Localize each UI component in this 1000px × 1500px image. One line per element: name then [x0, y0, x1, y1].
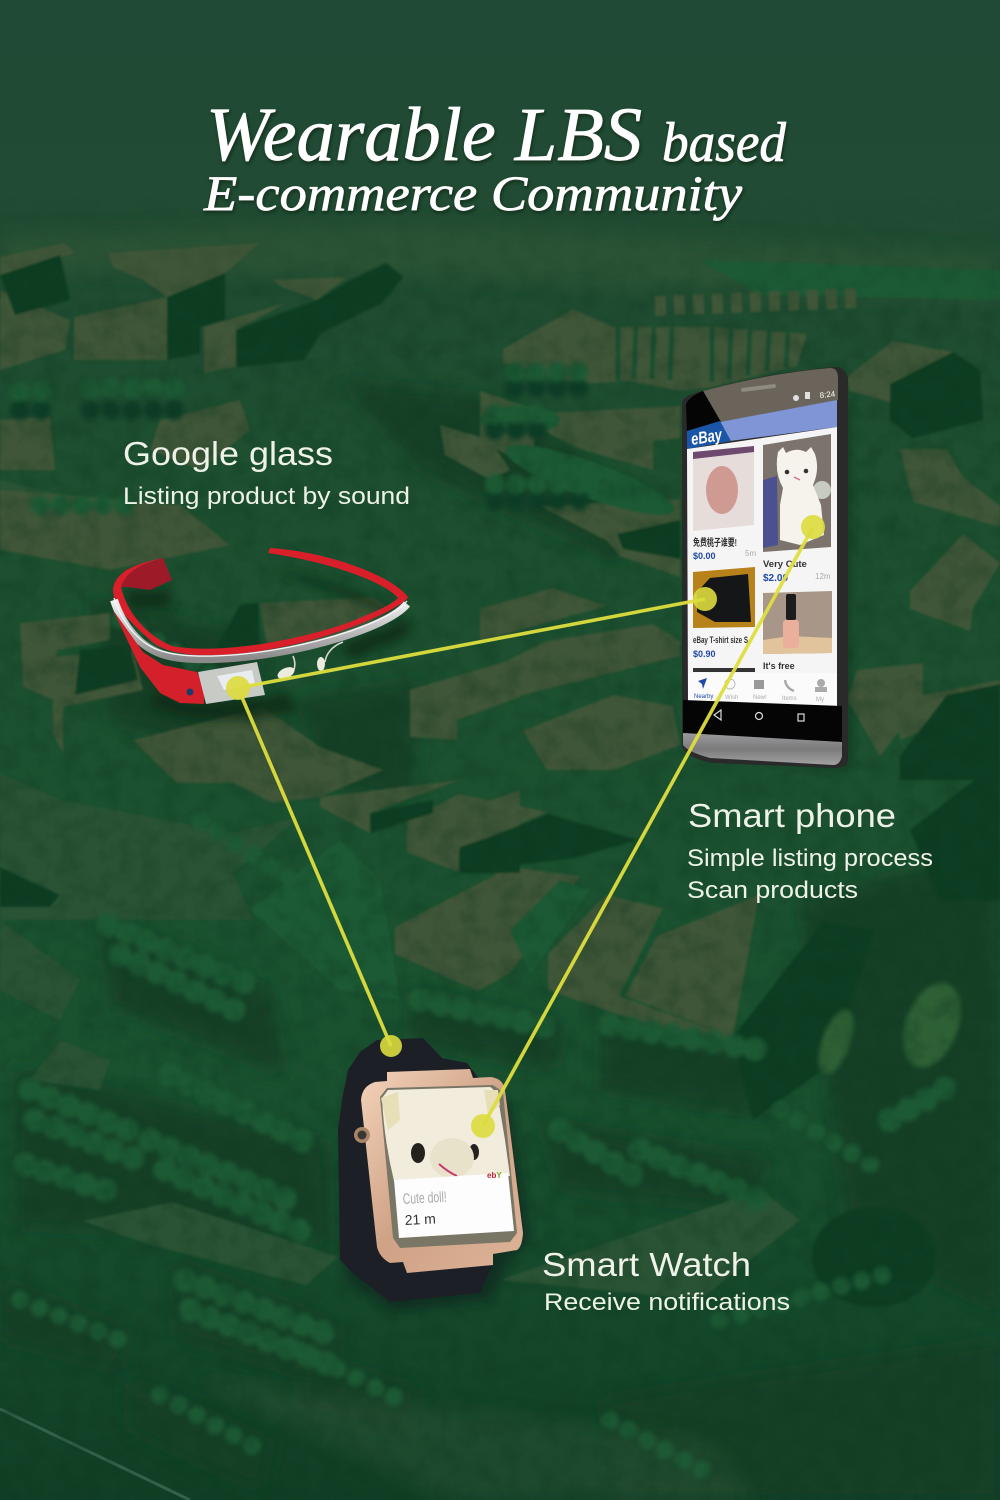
label: Smart Watch [542, 1246, 790, 1316]
phone chin [683, 733, 842, 765]
listing: t-shirt: eBay T-shirt size S [693, 635, 748, 645]
phone nav bar [683, 700, 842, 742]
listing: alpaca doll: 12m [815, 572, 831, 581]
notification card: 21 m [404, 1210, 436, 1228]
label: Google glass: Google glass [123, 435, 333, 472]
label: Smart phone: Scan products [687, 877, 858, 904]
icon: smartphone: eBay [690, 425, 724, 449]
connection nodes [226, 515, 825, 1138]
listing: t-shirt: $0.90 [693, 649, 716, 659]
icon: Google Glass device [113, 548, 410, 720]
listing: alpaca doll: Very Cute [763, 559, 807, 570]
label: Google glass: Listing product by sound [123, 483, 410, 510]
label: Google glass [123, 435, 410, 510]
title: based [662, 112, 787, 174]
listing: t-shirt [693, 567, 755, 659]
icon: smartwatch [338, 1038, 530, 1312]
phone bottom tabs: Wish [725, 695, 738, 701]
listing: peach: 免费桃子谁要! [693, 536, 737, 549]
phone top bezel [703, 368, 838, 422]
listing: nail polish: It's free [763, 661, 795, 671]
watch case [361, 1069, 523, 1273]
watch screen with alpaca [380, 1085, 517, 1248]
label: Smart phone: Simple listing process [687, 845, 933, 872]
listing: peach [693, 446, 756, 561]
title [203, 93, 787, 221]
notification card: ebY [487, 1171, 502, 1180]
phone bottom tabs [688, 673, 837, 706]
label: Smart phone [687, 797, 933, 904]
title: Wearable LBS [206, 93, 642, 177]
title: E-commerce Community [203, 165, 743, 221]
notification card: Cute doll! [402, 1189, 447, 1208]
watch strap [338, 1038, 492, 1302]
phone bottom tabs: Items [782, 696, 797, 702]
label: Smart Watch: Smart Watch [542, 1246, 751, 1283]
striped buildings [618, 298, 862, 382]
listing: peach: $0.00 [693, 551, 716, 561]
phone screen [687, 427, 837, 706]
listing: nail polish [763, 591, 832, 671]
icon: smartphone [682, 367, 850, 770]
label: Smart Watch: Receive notifications [544, 1289, 790, 1316]
phone bottom tabs: My [816, 697, 824, 703]
listing: alpaca doll [763, 434, 831, 584]
listing: peach: 5m [745, 549, 756, 558]
phone bottom tabs: Nearby [694, 694, 713, 700]
label: Smart phone: Smart phone [688, 797, 896, 834]
connection lines [238, 527, 813, 1126]
phone bottom tabs: New! [753, 695, 767, 701]
icon: smartphone: 8:24 [819, 389, 836, 400]
phone status bar and header [720, 400, 837, 441]
notification card [394, 1171, 514, 1238]
listing: alpaca doll: $2.00 [763, 573, 788, 584]
